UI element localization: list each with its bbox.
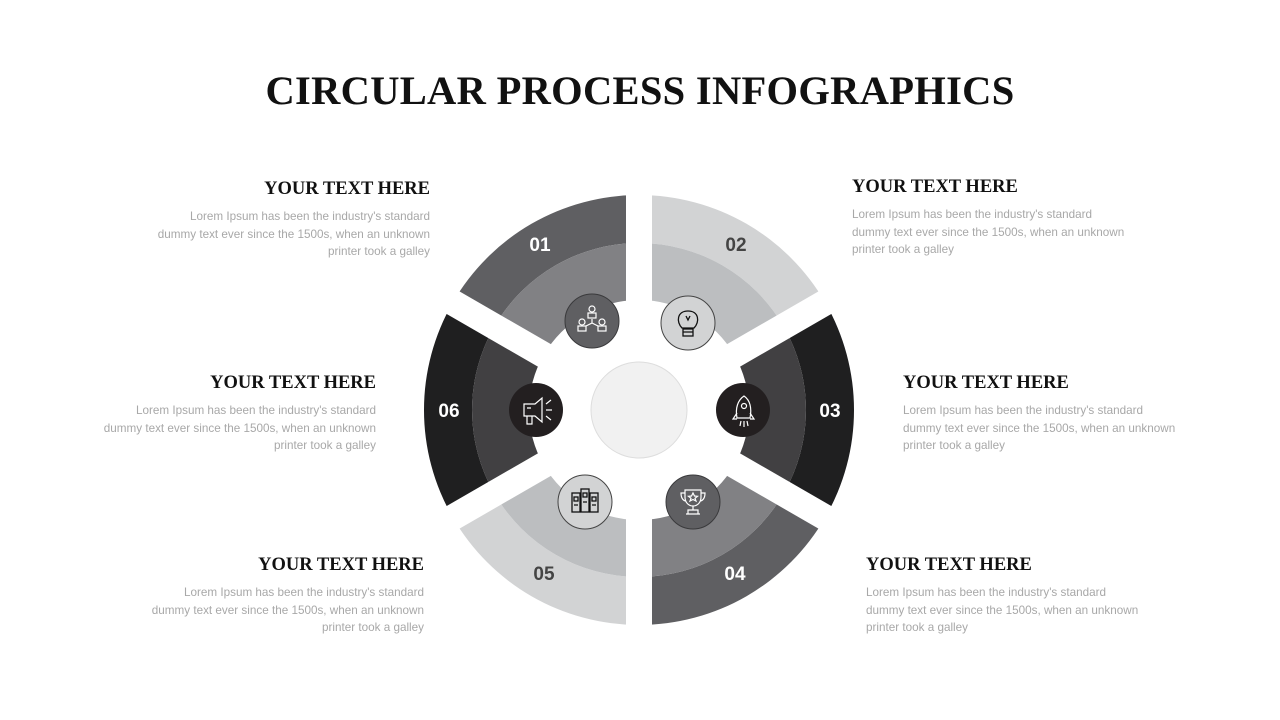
numbers	[438, 235, 841, 585]
icon: buildings	[558, 475, 612, 529]
icon: megaphone	[509, 383, 563, 437]
segment 03	[734, 302, 854, 518]
text block 02: Lorem Ipsum has been the industry's standard	[852, 208, 1092, 221]
numbers: 05	[533, 564, 555, 585]
text block 04: printer took a galley	[866, 621, 968, 634]
text block 03: printer took a galley	[903, 439, 1005, 452]
numbers: 06	[438, 401, 460, 422]
text block 06: Lorem Ipsum has been the industry's standard	[136, 404, 376, 417]
text block 02: printer took a galley	[852, 243, 954, 256]
text block 03	[903, 373, 1175, 452]
text block 03: YOUR TEXT HERE	[903, 373, 1069, 393]
text block 01	[158, 179, 430, 258]
text block 01: printer took a galley	[328, 245, 430, 258]
text block 03: dummy text ever since the 1500s, when an unknown	[903, 422, 1175, 435]
numbers: 03	[819, 401, 841, 422]
text block 06: YOUR TEXT HERE	[210, 373, 376, 393]
icon: rocket	[716, 383, 770, 437]
text block 04: Lorem Ipsum has been the industry's standard	[866, 586, 1106, 599]
text block 05: YOUR TEXT HERE	[258, 555, 424, 575]
text block 04: YOUR TEXT HERE	[866, 555, 1032, 575]
segment 05	[453, 465, 639, 625]
text block 03: Lorem Ipsum has been the industry's standard	[903, 404, 1143, 417]
text block 02: dummy text ever since the 1500s, when an unknown	[852, 226, 1124, 239]
numbers: 04	[724, 564, 746, 585]
text block 06: printer took a galley	[274, 439, 376, 452]
text block 01: Lorem Ipsum has been the industry's standard	[190, 210, 430, 223]
center circle	[591, 362, 687, 458]
segment 01	[453, 195, 639, 355]
segment 06	[424, 302, 544, 518]
text block 02: YOUR TEXT HERE	[852, 177, 1018, 197]
text block 05: dummy text ever since the 1500s, when an unknown	[152, 604, 424, 617]
icon: team	[565, 294, 619, 348]
icon: trophy	[666, 475, 720, 529]
numbers: 02	[725, 235, 747, 256]
text block 05: Lorem Ipsum has been the industry's standard	[184, 586, 424, 599]
title: CIRCULAR PROCESS INFOGRAPHICS	[265, 68, 1015, 113]
text block 06: dummy text ever since the 1500s, when an unknown	[104, 422, 376, 435]
text block 02	[852, 177, 1124, 256]
text block 04: dummy text ever since the 1500s, when an unknown	[866, 604, 1138, 617]
text block 01: YOUR TEXT HERE	[264, 179, 430, 199]
icon: bulb	[661, 296, 715, 350]
text block 01: dummy text ever since the 1500s, when an unknown	[158, 228, 430, 241]
text block 04	[866, 555, 1138, 634]
text block 05: printer took a galley	[322, 621, 424, 634]
text block 05	[152, 555, 424, 634]
text block 06	[104, 373, 376, 452]
numbers: 01	[529, 235, 551, 256]
segment 02	[639, 195, 825, 355]
segment 04	[639, 465, 825, 625]
